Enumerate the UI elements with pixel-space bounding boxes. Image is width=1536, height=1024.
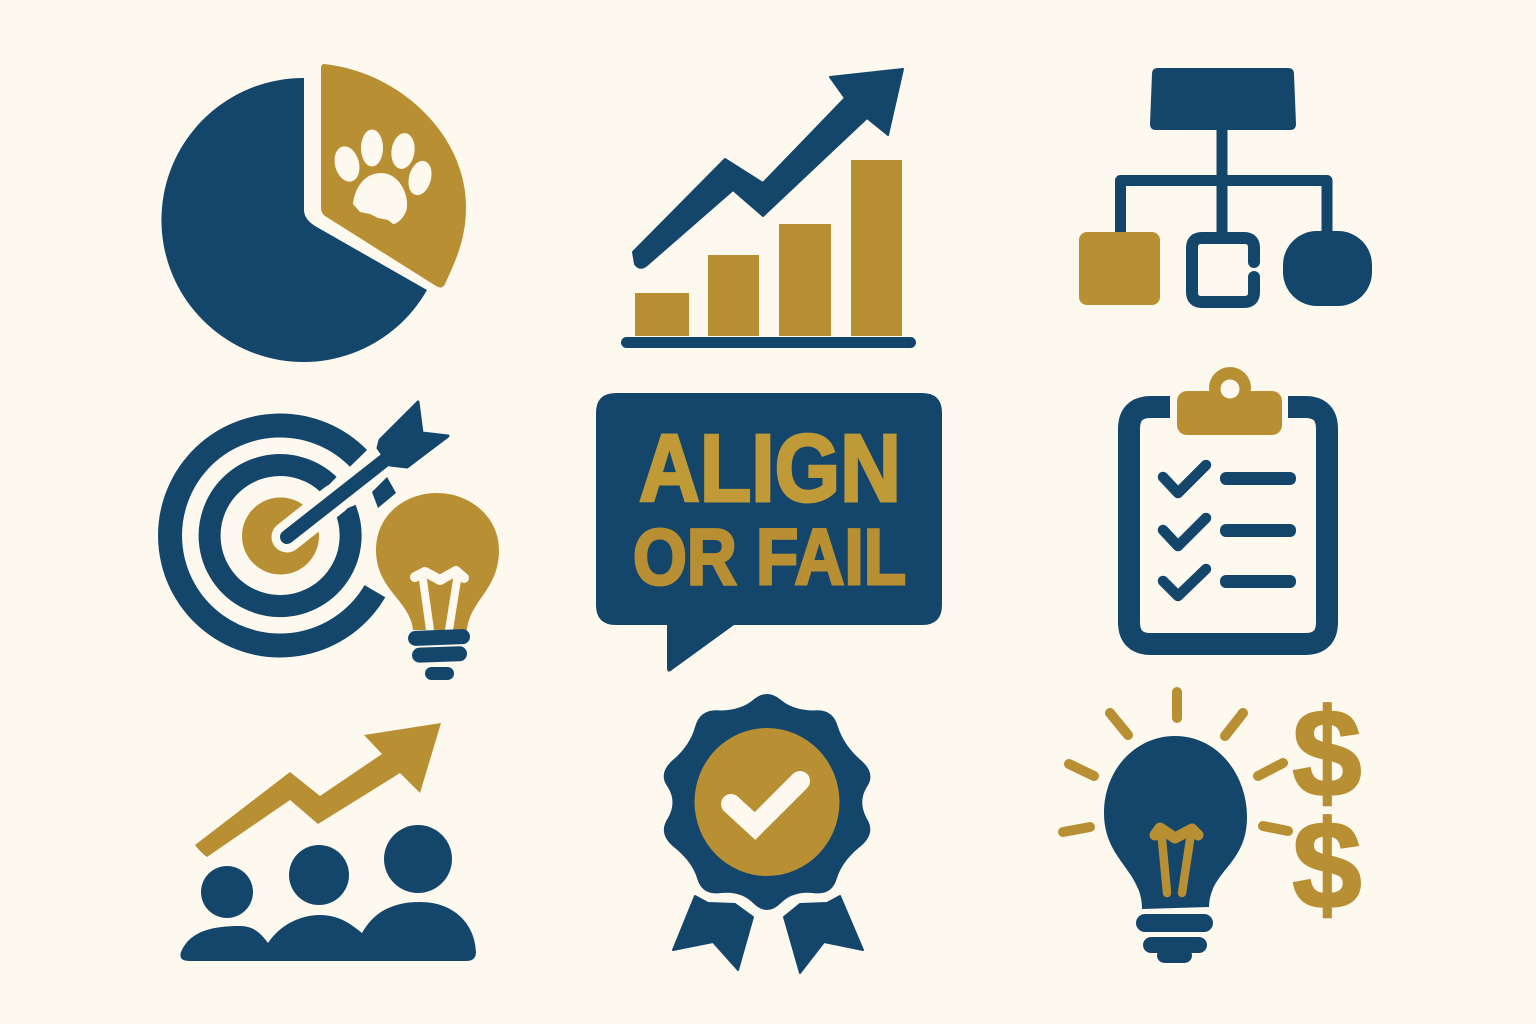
people heads (201, 825, 452, 918)
bulb base (1136, 914, 1213, 963)
lightbulb base (408, 629, 470, 680)
clipboard clip (1177, 367, 1282, 435)
bulb glass (1104, 736, 1247, 909)
headline: or fail: OR FAIL (633, 512, 906, 601)
connectors (1120, 130, 1327, 232)
ring fragment (372, 477, 396, 508)
arrow fletching (378, 402, 448, 467)
arrow shaft (287, 460, 385, 537)
pie gold slice (321, 64, 466, 288)
light rays (1063, 692, 1288, 832)
headline: align: ALIGN (639, 415, 901, 522)
icon: clipboard checklist (1129, 367, 1327, 644)
dollar signs (1293, 685, 1361, 935)
lightbulb filament (415, 571, 464, 630)
icon: team growth (180, 723, 476, 961)
icon: organisation chart (1079, 68, 1372, 306)
bullseye (242, 498, 319, 574)
pie main slice (161, 78, 427, 362)
dollar signs: $ (1293, 797, 1361, 935)
paw print (331, 130, 435, 224)
bars (635, 160, 902, 336)
growth arrow (195, 723, 441, 857)
outlined box (1192, 238, 1254, 302)
icon: target with arrow and lightbulb (170, 402, 499, 680)
icon: rising bar chart with arrow (621, 69, 916, 348)
icon: lightbulb and dollars (1063, 685, 1361, 963)
gold square (1079, 232, 1160, 305)
trend arrow (633, 69, 903, 268)
target rings (170, 426, 375, 646)
navy circle (1283, 231, 1372, 306)
list lines (1220, 472, 1296, 588)
bubble shape (596, 393, 942, 672)
baseline (621, 337, 916, 348)
icon: award rosette (664, 694, 870, 973)
clipboard board (1129, 407, 1327, 644)
check mark (731, 781, 800, 826)
bulb filament (1155, 828, 1198, 893)
central speech bubble (596, 393, 942, 672)
rosette seal (664, 694, 870, 910)
check marks (1163, 465, 1206, 596)
lightbulb glass (376, 493, 499, 630)
gold disc (694, 728, 840, 876)
ribbon tails (673, 896, 863, 973)
dollar signs: $ (1293, 685, 1361, 823)
people bodies (180, 902, 476, 961)
icon: pie chart with paw (161, 64, 466, 362)
top box (1150, 68, 1296, 130)
